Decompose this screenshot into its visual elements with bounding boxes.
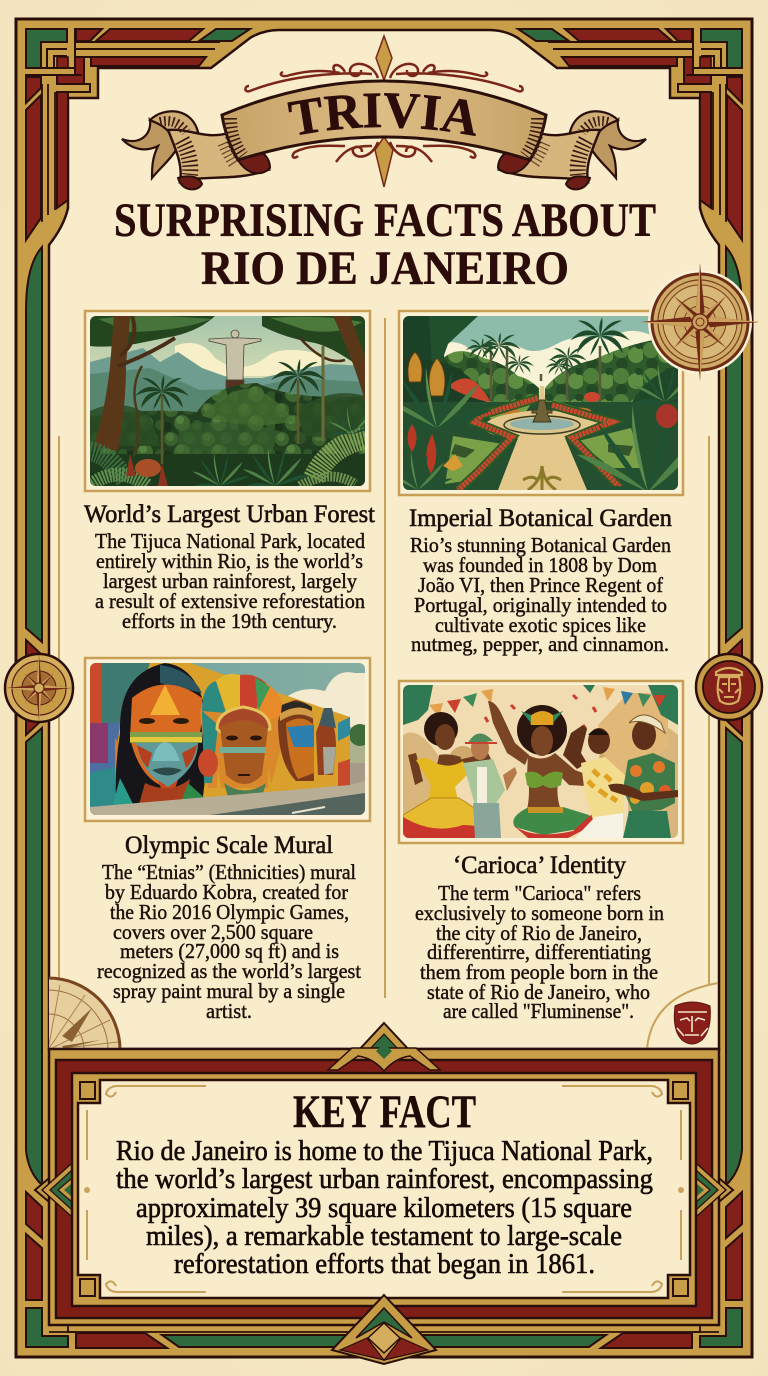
first face bbox=[116, 663, 208, 805]
text: carioca identity: exclusively to someone born in bbox=[415, 901, 664, 925]
panel: botanical garden image bbox=[398, 310, 684, 496]
headdress and second face bbox=[200, 686, 280, 788]
banner ornaments bbox=[245, 36, 523, 187]
text: world's largest urban forest: efforts in the 19th century. bbox=[122, 609, 337, 633]
text: imperial botanical garden: Rio’s stunning Botanical Garden bbox=[410, 533, 671, 557]
bottom centre diamond ornament bbox=[332, 1295, 436, 1364]
text: imperial botanical garden: nutmeg, pepper, and cinnamon. bbox=[411, 632, 669, 656]
trivia banner bbox=[121, 34, 647, 190]
key fact body: reforestation efforts that began in 1861. bbox=[174, 1249, 595, 1280]
third face bbox=[278, 700, 314, 781]
key fact heading: KEY FACT bbox=[293, 1086, 476, 1138]
key fact body: Rio de Janeiro is home to the Tijuca National Park, bbox=[116, 1136, 653, 1167]
key fact panel bbox=[35, 1023, 733, 1325]
text: world's largest urban forest bbox=[84, 501, 375, 633]
panel: mural image bbox=[85, 658, 371, 821]
icon: corner compass fragment bbox=[49, 976, 122, 1048]
key fact body: the world’s largest urban rainforest, encompassing bbox=[116, 1164, 653, 1195]
text: world's largest urban forest: The Tijuca National Park, located bbox=[95, 529, 365, 553]
text: world's largest urban forest: entirely within Rio, is the world’s bbox=[96, 549, 363, 573]
text: olympic scale mural: covers over 2,500 square bbox=[113, 920, 313, 944]
text: carioca identity: The term "Carioca" refers bbox=[438, 881, 641, 905]
vertical column dividers bbox=[59, 318, 709, 998]
text: world's largest urban forest: a result of extensive reforestation bbox=[95, 589, 365, 613]
text: olympic scale mural: by Eduardo Kobra, created for bbox=[105, 880, 348, 904]
text: olympic scale mural: recognized as the world’s largest bbox=[97, 959, 361, 983]
key fact body: miles), a remarkable testament to large-scale bbox=[146, 1221, 622, 1252]
text: imperial botanical garden: João VI, then Prince Regent of bbox=[418, 573, 663, 597]
panel: carioca image bbox=[399, 681, 683, 843]
panel: urban forest image bbox=[85, 311, 377, 491]
man in white shirt bbox=[563, 725, 625, 838]
text: carioca identity: them from people born in the bbox=[420, 960, 658, 984]
text: imperial botanical garden bbox=[409, 505, 672, 656]
key fact body: approximately 39 square kilometers (15 square bbox=[136, 1193, 632, 1224]
text: olympic scale mural: meters (27,000 sq ft) and is bbox=[120, 939, 339, 963]
text: olympic scale mural bbox=[97, 832, 361, 1023]
text: carioca identity: differentirre, differentiating bbox=[427, 940, 651, 964]
main title: SURPRISING FACTS ABOUT bbox=[114, 194, 656, 247]
dancer in yellow dress bbox=[403, 712, 499, 838]
man with straw hat bbox=[608, 715, 678, 838]
text: carioca identity: ‘Carioca’ Identity bbox=[453, 852, 626, 879]
panel chevrons and top arch bbox=[35, 1023, 733, 1223]
text: olympic scale mural: spray paint mural by a single bbox=[113, 979, 345, 1003]
text: imperial botanical garden: Portugal, originally intended to bbox=[414, 593, 667, 617]
text: world's largest urban forest: World’s Largest Urban Forest bbox=[84, 501, 375, 528]
text: olympic scale mural: artist. bbox=[206, 999, 252, 1023]
central dancer bbox=[488, 701, 603, 838]
text: olympic scale mural: the Rio 2016 Olympic Games, bbox=[110, 900, 349, 924]
text: carioca identity: state of Rio de Janeiro, who bbox=[427, 980, 650, 1004]
key fact body bbox=[116, 1136, 653, 1280]
text: carioca identity bbox=[415, 852, 664, 1023]
text: carioca identity: the city of Rio de Janeiro, bbox=[436, 921, 642, 945]
main title bbox=[114, 194, 656, 295]
text: olympic scale mural: The “Etnias” (Ethnicities) mural bbox=[102, 860, 356, 884]
man in patterned shirt bbox=[463, 733, 517, 838]
icon: right mask medallion bbox=[696, 654, 762, 720]
trivia banner: TRIVIA bbox=[287, 93, 476, 136]
text: imperial botanical garden: cultivate exotic spices like bbox=[435, 613, 646, 637]
text: imperial botanical garden: was founded in 1808 by Dom bbox=[423, 553, 657, 577]
icon: large compass rose bbox=[641, 263, 759, 381]
text: olympic scale mural: Olympic Scale Mural bbox=[125, 832, 333, 859]
fourth face bbox=[316, 724, 336, 775]
icon: left compass medallion bbox=[5, 654, 73, 722]
text: world's largest urban forest: largest urban rainforest, largely bbox=[103, 569, 357, 593]
main title: RIO DE JANEIRO bbox=[201, 242, 569, 295]
text: imperial botanical garden: Imperial Botanical Garden bbox=[409, 505, 672, 532]
icon: tribal mask with arc bbox=[647, 983, 718, 1049]
text: carioca identity: are called "Fluminense". bbox=[443, 999, 634, 1023]
